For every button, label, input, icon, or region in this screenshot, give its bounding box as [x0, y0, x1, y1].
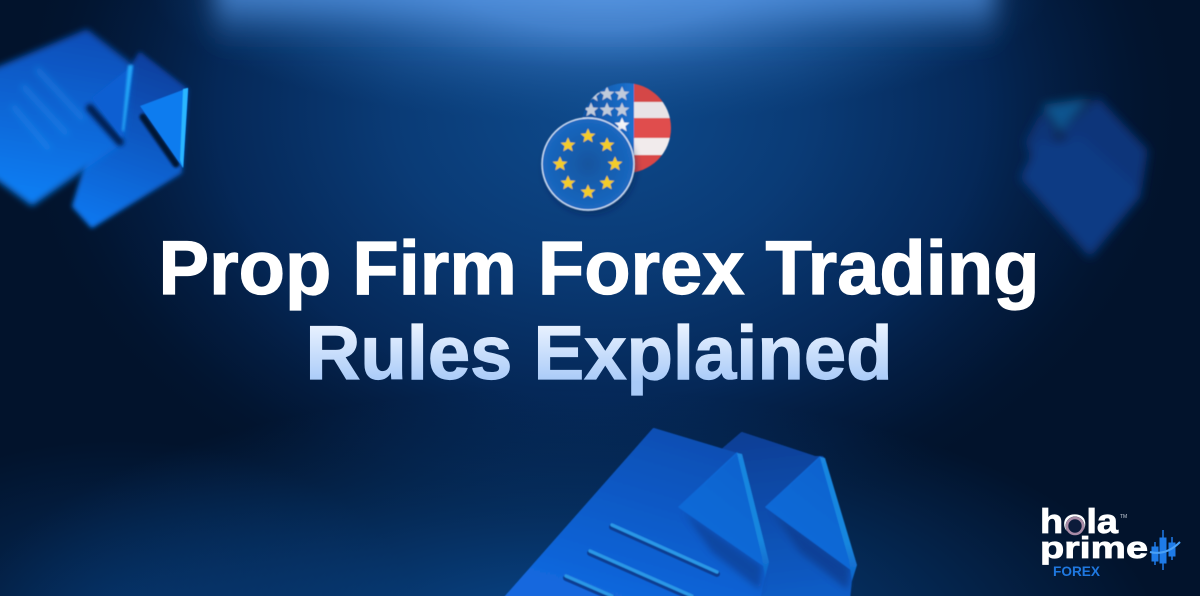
illustration: blurred documents top right	[1020, 97, 1148, 258]
logo: hola prime forex	[1040, 503, 1180, 579]
EU flag coin	[544, 122, 636, 214]
front document	[504, 430, 765, 596]
back fold	[766, 457, 852, 570]
logo bubble	[1066, 516, 1084, 536]
front fold	[679, 453, 766, 567]
back fold	[140, 88, 188, 168]
logo: hola prime forex: FOREX	[1053, 563, 1101, 579]
logo: hola prime forex: prime	[1040, 530, 1148, 565]
logo: hola prime forex: TM	[1120, 514, 1127, 520]
title line 1: Prop Firm Forex Trading	[158, 226, 1040, 311]
icon: US and EU currency flags	[542, 83, 672, 214]
logo candles	[1150, 530, 1180, 570]
front fold	[92, 65, 133, 138]
illustration: blurred documents top left	[0, 29, 188, 226]
logo: hola prime forex: hola	[1040, 503, 1119, 541]
US flag coin	[580, 83, 672, 173]
fold shadows	[684, 512, 762, 590]
illustration: documents bottom centre	[504, 430, 857, 596]
back document	[700, 434, 851, 596]
fold shadows	[90, 108, 120, 142]
text lines on document	[566, 525, 717, 596]
back document	[74, 54, 186, 226]
title	[158, 226, 1040, 396]
front document	[0, 29, 133, 206]
title line 2: Rules Explained	[306, 311, 892, 396]
